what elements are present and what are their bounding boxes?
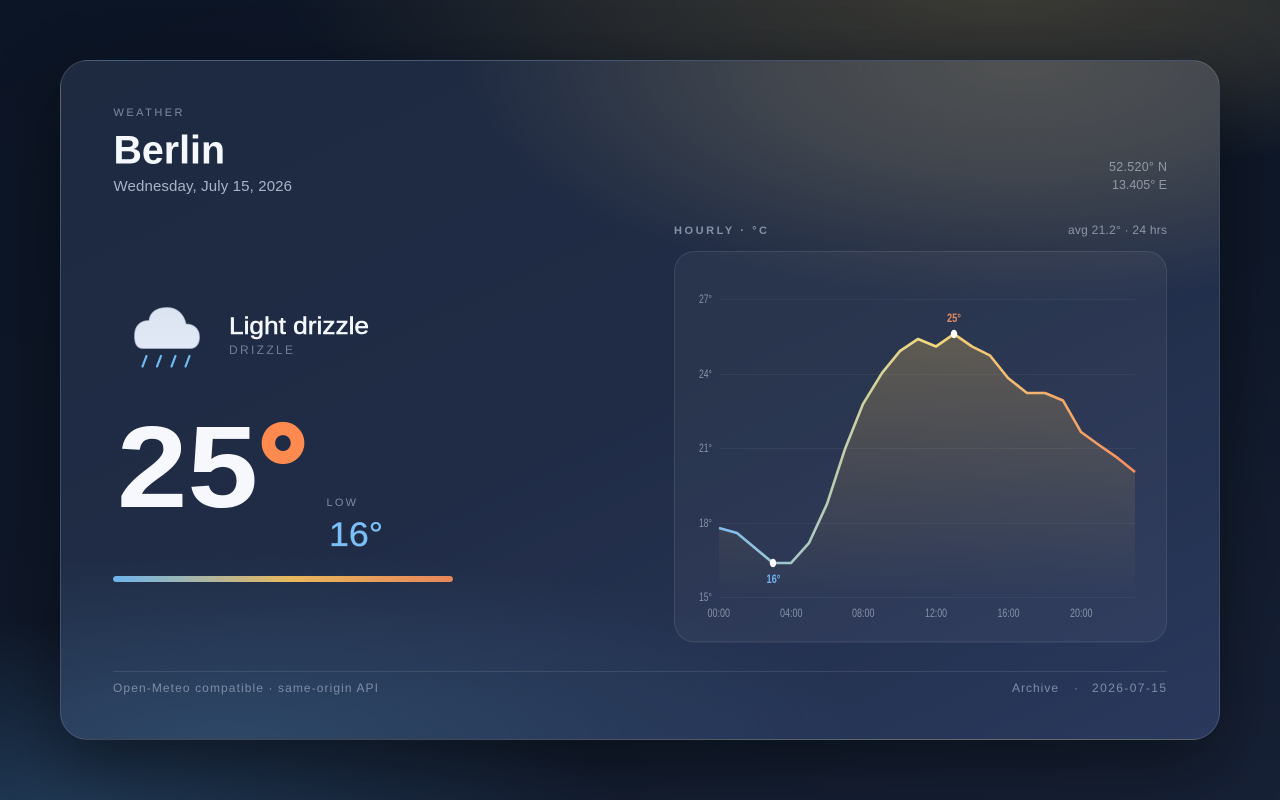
x axis labels: 20:00 (1070, 608, 1092, 620)
low marker (766, 559, 781, 586)
y axis labels (699, 294, 712, 604)
panel: hourly chart (674, 252, 1166, 642)
footer archive date: Archive (1012, 681, 1058, 695)
low marker: 16° (766, 574, 781, 586)
temperature line (719, 334, 1135, 563)
y axis labels: 27° (699, 294, 712, 306)
current temperature: 25 (117, 402, 258, 532)
x axis labels: 04:00 (780, 608, 802, 620)
x axis labels: 12:00 (925, 608, 947, 620)
icon: cloud with drizzle (134, 308, 200, 366)
panel: weather card (60, 60, 1220, 740)
low temperature: 16° (329, 516, 383, 554)
chart heading: HOURLY · °C (674, 225, 767, 237)
x axis labels (708, 608, 1092, 620)
footer archive date: · (1074, 681, 1078, 695)
y axis labels: 21° (699, 443, 712, 455)
temperature range bar (113, 576, 453, 582)
date: Wednesday, July 15, 2026 (114, 178, 292, 195)
eyebrow label: WEATHER (114, 107, 183, 119)
footer source note: Open-Meteo compatible · same-origin API (113, 681, 378, 695)
y axis labels: 15° (699, 592, 712, 604)
chart summary: avg 21.2° · 24 hrs (1068, 223, 1167, 237)
current temperature (117, 400, 308, 537)
x axis labels: 00:00 (708, 608, 730, 620)
x axis labels: 08:00 (852, 608, 874, 620)
area under temperature line (719, 334, 1135, 597)
y axis labels: 18° (699, 518, 712, 530)
condition name: Light drizzle (229, 313, 369, 340)
coordinates: 52.520° N (1109, 160, 1167, 174)
high marker (947, 313, 961, 338)
x axis labels: 16:00 (998, 608, 1020, 620)
degree symbol: ° (258, 400, 308, 537)
footer archive date (1012, 681, 1166, 695)
low label: LOW (326, 497, 357, 509)
title: city: Berlin (114, 128, 225, 172)
high marker: 25° (947, 313, 961, 325)
coordinates: 13.405° E (1112, 178, 1167, 192)
coordinates (1109, 160, 1167, 192)
footer archive date: 2026-07-15 (1092, 681, 1166, 695)
condition category: DRIZZLE (229, 343, 293, 357)
y axis labels: 24° (699, 369, 712, 381)
